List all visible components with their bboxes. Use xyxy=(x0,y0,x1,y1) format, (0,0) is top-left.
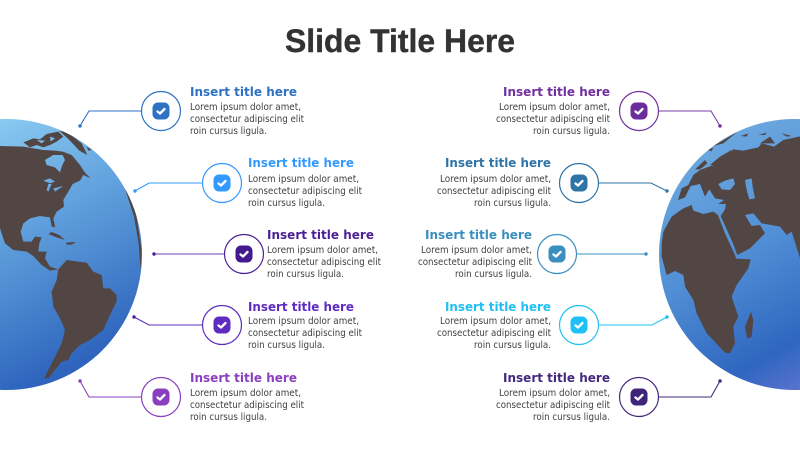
text: roin cursus ligula. xyxy=(455,269,532,280)
text: roin cursus ligula. xyxy=(267,269,344,280)
Africa edge xyxy=(124,188,142,270)
title: Slide Title Here xyxy=(285,23,515,59)
text: Insert title here xyxy=(445,300,551,315)
text: Insert title here xyxy=(503,371,610,386)
connector xyxy=(78,111,141,128)
connector xyxy=(133,183,202,193)
icon xyxy=(560,164,598,202)
text: Insert title here xyxy=(190,85,297,100)
text: Insert title here xyxy=(248,300,354,315)
icon xyxy=(142,378,180,416)
text xyxy=(248,300,362,351)
Madagascar xyxy=(745,312,753,339)
text xyxy=(190,85,304,137)
text xyxy=(496,85,610,137)
item: left 4 xyxy=(132,300,362,351)
text: consectetur adipiscing elit xyxy=(496,400,610,411)
text: Insert title here xyxy=(425,228,532,243)
text: Lorem ipsum dolor amet, xyxy=(421,245,532,256)
text: roin cursus ligula. xyxy=(190,412,267,423)
text xyxy=(418,228,532,280)
North America landmass xyxy=(0,146,91,271)
text xyxy=(496,371,610,423)
icon xyxy=(202,306,242,344)
text: roin cursus ligula. xyxy=(248,198,325,209)
item: left 1 xyxy=(78,85,304,137)
connector xyxy=(152,252,224,256)
connector xyxy=(599,315,669,325)
icon xyxy=(560,306,598,344)
Northern islands xyxy=(695,132,792,169)
item: right 5 xyxy=(496,371,722,423)
text: roin cursus ligula. xyxy=(248,340,325,351)
item: left 2 xyxy=(133,156,362,209)
text: Lorem ipsum dolor amet, xyxy=(440,316,551,327)
text: roin cursus ligula. xyxy=(533,412,610,423)
Arctic islands xyxy=(23,132,63,147)
text: Lorem ipsum dolor amet, xyxy=(190,388,301,399)
connector xyxy=(132,315,202,325)
Caribbean islands xyxy=(48,232,76,245)
text: Lorem ipsum dolor amet, xyxy=(248,174,359,185)
item: right 3 xyxy=(418,228,648,280)
text: Insert title here xyxy=(267,228,374,243)
text: consectetur adipiscing elit xyxy=(190,114,304,125)
text: Lorem ipsum dolor amet, xyxy=(499,388,610,399)
text: consectetur adipiscing elit xyxy=(437,328,551,339)
text: Lorem ipsum dolor amet, xyxy=(267,245,378,256)
text: Lorem ipsum dolor amet, xyxy=(190,102,301,113)
text: Insert title here xyxy=(503,85,610,100)
item: right 1 xyxy=(496,85,722,137)
text: roin cursus ligula. xyxy=(190,126,267,137)
icon xyxy=(202,164,242,202)
text: roin cursus ligula. xyxy=(474,340,551,351)
text xyxy=(248,156,362,209)
South America xyxy=(44,260,117,378)
text: Lorem ipsum dolor amet, xyxy=(499,102,610,113)
connector xyxy=(577,252,648,256)
text xyxy=(437,300,551,351)
connector xyxy=(659,379,722,397)
text: consectetur adipiscing elit xyxy=(248,328,362,339)
icon xyxy=(224,234,264,274)
text: Insert title here xyxy=(445,156,551,171)
globe: Americas xyxy=(0,119,142,390)
globe: Africa and Eurasia xyxy=(659,119,800,390)
item: left 5 xyxy=(78,371,304,423)
Greenland edge xyxy=(59,131,92,155)
text: consectetur adipiscing elit xyxy=(248,186,362,197)
text: Insert title here xyxy=(248,156,354,171)
item: right 2 xyxy=(437,156,669,209)
icon xyxy=(142,92,180,130)
item: left 3 xyxy=(152,228,381,280)
text xyxy=(267,228,381,280)
text: Insert title here xyxy=(190,371,297,386)
text: consectetur adipiscing elit xyxy=(496,114,610,125)
connector xyxy=(659,111,722,128)
connector xyxy=(599,183,669,193)
icon xyxy=(620,378,658,416)
item: right 4 xyxy=(437,300,669,351)
connector xyxy=(78,379,141,397)
text: consectetur adipiscing elit xyxy=(190,400,304,411)
icon xyxy=(538,234,576,274)
text: Lorem ipsum dolor amet, xyxy=(440,174,551,185)
text: consectetur adipiscing elit xyxy=(437,186,551,197)
Africa xyxy=(662,205,751,353)
icon xyxy=(620,92,658,130)
Eurasia landmass xyxy=(678,136,800,263)
text: roin cursus ligula. xyxy=(533,126,610,137)
text: Lorem ipsum dolor amet, xyxy=(248,316,359,327)
text: consectetur adipiscing elit xyxy=(267,257,381,268)
text: consectetur adipiscing elit xyxy=(418,257,532,268)
text xyxy=(437,156,551,209)
text: roin cursus ligula. xyxy=(474,198,551,209)
text xyxy=(190,371,304,423)
